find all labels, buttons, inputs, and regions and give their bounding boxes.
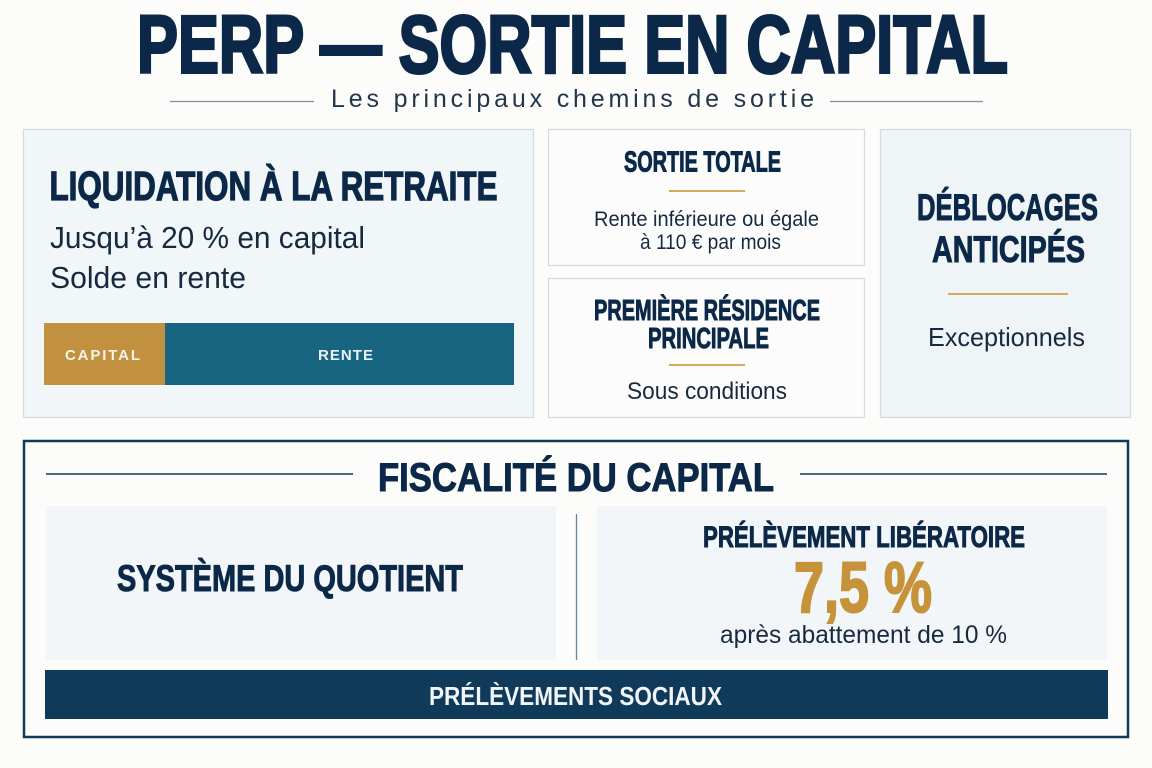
banner: prélèvements sociaux [45,670,1108,719]
banner: prélèvements sociaux: PRÉLÈVEMENTS SOCIAUX [429,681,723,711]
text: solde en rente: Solde en rente [50,260,246,295]
bar: rente [165,323,514,385]
heading: prélèvement libératoire: PRÉLÈVEMENT LIBÉRATOIRE [703,520,1025,554]
text: exceptionnels: Exceptionnels [928,322,1085,352]
heading: liquidation: LIQUIDATION À LA RETRAITE [50,163,498,209]
bar: capital [44,323,165,385]
panel: fiscalité du capital [24,441,1128,737]
panel: liquidation à la retraite [24,130,534,418]
bar: rente: RENTE [318,347,373,364]
text: jusqu'à 20 %: Jusqu’à 20 % en capital [50,220,365,255]
text: après abattement: après abattement de 10 % [720,621,1007,649]
heading: sortie totale: SORTIE TOTALE [624,146,781,178]
panel: prélèvement libératoire [597,506,1107,660]
text: sous conditions: Sous conditions [627,378,787,405]
panel: système du quotient: SYSTÈME DU QUOTIENT [117,558,463,599]
panel: première résidence principale [548,278,864,418]
panel: déblocages anticipés [880,130,1130,418]
panel: sortie totale [548,130,864,266]
panel: sortie totale: à 110 € par mois [640,231,781,254]
heading: première résidence: PREMIÈRE RÉSIDENCE [594,293,820,327]
subtitle: Les principaux chemins de sortie [331,85,814,113]
heading: fiscalité: FISCALITÉ DU CAPITAL [378,455,774,500]
text: rente inférieure: Rente inférieure ou égale [594,208,819,231]
bar: capital: CAPITAL [65,347,140,364]
panel: première résidence principale: PRINCIPALE [648,323,769,355]
panel: système du quotient [46,506,556,660]
panel: déblocages anticipés: ANTICIPÉS [932,229,1085,270]
number: 7,5 %: 7,5 % [794,549,932,628]
